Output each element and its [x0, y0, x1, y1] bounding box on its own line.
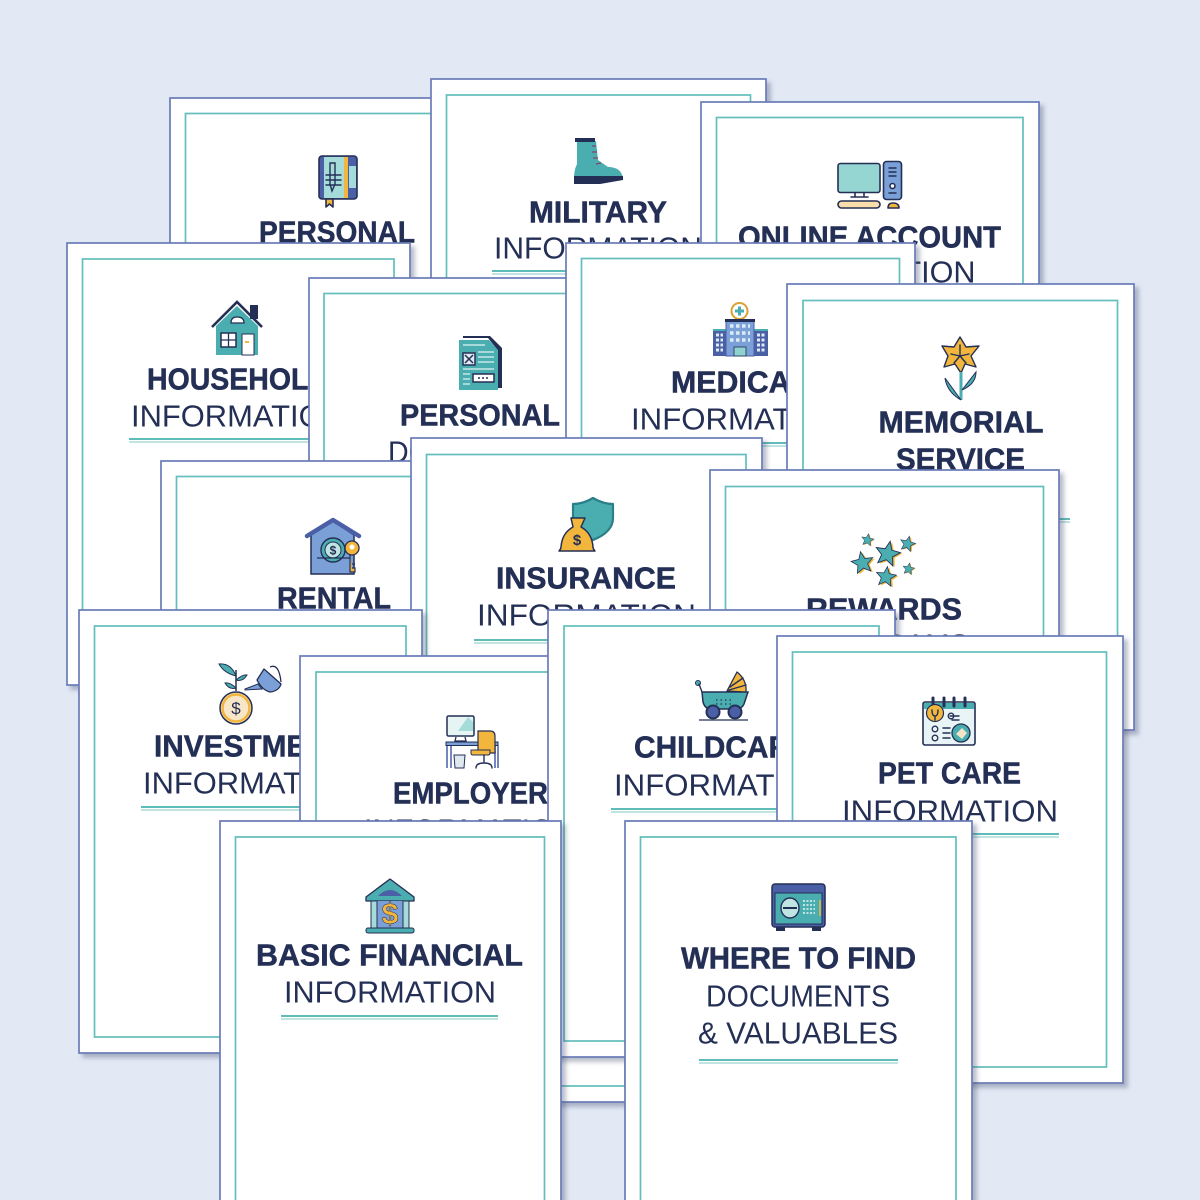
- icon: lily flower: [942, 337, 979, 400]
- heading: military: MILITARY: [529, 195, 667, 230]
- underline: [141, 807, 359, 810]
- icon: stroller: [696, 672, 748, 720]
- subheading: information: INFORMATION: [764, 255, 976, 290]
- icon: notebook and pen: [319, 156, 357, 207]
- icon: house: [212, 302, 262, 355]
- subheading: programs: PROGRAMS: [799, 628, 969, 663]
- panel: where to find documents and valuables card: [625, 821, 972, 1200]
- heading: childcare: CHILDCARE: [634, 730, 810, 765]
- heading: household: HOUSEHOLD: [147, 362, 329, 397]
- subheading: information: INFORMATION: [131, 399, 345, 434]
- subheading: information: INFORMATION: [631, 402, 847, 437]
- icon: pet calendar: [923, 698, 975, 745]
- heading: pet care: PET CARE: [878, 756, 1021, 791]
- icon: bank: [366, 879, 414, 933]
- panel: employer information card: [300, 656, 640, 1102]
- subheading: information: INFORMATION: [861, 479, 1061, 514]
- subheading: documents: DOCUMENTS: [388, 435, 572, 470]
- subheading: information: INFORMATION: [284, 975, 496, 1010]
- subheading: information: INFORMATION: [364, 813, 576, 848]
- icon: safe: [772, 884, 825, 931]
- subheading: information: INFORMATION: [614, 768, 830, 803]
- panel: rental information card: [161, 461, 507, 901]
- heading: employer: EMPLOYER: [393, 776, 548, 811]
- icon: plant, coin and watering can: $: [231, 699, 241, 718]
- heading: personal: PERSONAL: [259, 215, 415, 250]
- panel: online account information card: [701, 102, 1039, 538]
- panel: household information card: [67, 243, 410, 685]
- heading: rewards: REWARDS: [806, 592, 962, 627]
- icon: shield and money bag: [559, 498, 613, 551]
- heading: investment: INVESTMENT: [154, 729, 346, 764]
- underline: [129, 439, 347, 442]
- heading: memorial service: MEMORIAL: [878, 405, 1044, 440]
- icon: boot: [574, 138, 623, 184]
- icon: shield and money bag: $: [573, 532, 582, 549]
- panel: memorial service card: [787, 284, 1134, 730]
- icon: desktop computer: [838, 162, 902, 208]
- subheading: information: INFORMATION: [143, 766, 357, 801]
- subheading: documents and valuables: & VALUABLES: [698, 1016, 898, 1051]
- underline: [492, 271, 704, 274]
- heading: insurance: INSURANCE: [496, 561, 676, 596]
- icon: hospital: [713, 303, 768, 356]
- heading: medical: MEDICAL: [671, 365, 809, 400]
- underline: [852, 519, 1070, 522]
- panel: insurance information card: [411, 438, 762, 888]
- heading: rental: RENTAL: [277, 581, 391, 616]
- panel: military information card: [431, 79, 766, 511]
- icon: rental house and key: [307, 520, 359, 574]
- heading: personal: PERSONAL: [400, 398, 560, 433]
- heading: memorial service: [878, 405, 1044, 477]
- panel: basic financial information card: [220, 821, 561, 1200]
- heading: online account: ONLINE ACCOUNT: [738, 220, 1001, 255]
- icon: plant, coin and watering can: [219, 664, 281, 724]
- subheading: information: INFORMATION: [477, 598, 696, 633]
- panel: rewards card: [710, 470, 1059, 920]
- heading: basic financial: BASIC FINANCIAL: [256, 938, 523, 973]
- subheading: information: INFORMATION: [494, 231, 702, 266]
- subheading: documents and valuables: DOCUMENTS: [706, 979, 890, 1014]
- panel: pet care information card: [777, 636, 1123, 1083]
- underline: [281, 1016, 498, 1019]
- panel: investment information card: [79, 610, 422, 1053]
- heading: memorial service: SERVICE: [896, 442, 1025, 477]
- underline: [630, 443, 848, 446]
- subheading: documents and valuables: [698, 979, 898, 1051]
- icon: bank: $: [382, 898, 399, 931]
- icon: stars: [850, 533, 918, 588]
- underline: [699, 1060, 898, 1063]
- panel: medical information card: [566, 243, 915, 691]
- panel: personal documents card: [309, 278, 651, 714]
- underline: [474, 640, 700, 643]
- icon: document: [459, 336, 502, 390]
- heading: where to find: WHERE TO FIND: [681, 941, 916, 976]
- panel: personal information card: [170, 98, 510, 534]
- underline: [840, 834, 1059, 837]
- panel: childcare information card: [548, 610, 895, 1057]
- icon: desk, monitor and chair: [446, 716, 498, 768]
- icon: rental house and key: $: [330, 544, 337, 558]
- underline: [611, 809, 833, 812]
- subheading: information: INFORMATION: [842, 794, 1058, 829]
